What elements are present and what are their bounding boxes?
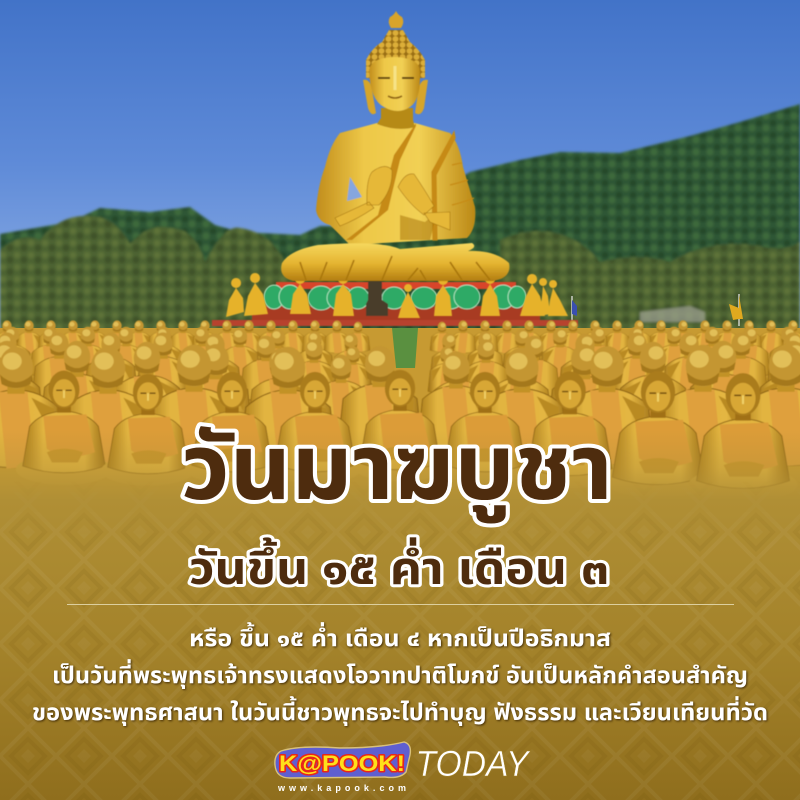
Buddha face [369, 57, 420, 111]
ground behind monks [0, 328, 800, 514]
gap between arm and torso [347, 177, 362, 201]
subtitle: date: วันขึ้น ๑๕ ค่ำ เดือน ๓ [189, 537, 609, 594]
Buddha robe sash [346, 123, 416, 240]
rows of golden monk statues [0, 320, 800, 502]
Buddha ears [363, 80, 428, 114]
sky background [0, 0, 800, 330]
small golden disciples around base [226, 273, 568, 318]
panel: gold patterned text background [0, 430, 800, 800]
divider [67, 604, 734, 605]
body text: หรือ ขึ้น ๑๕ ค่ำ เดือน ๔ หากเป็นปีอธิกมาส [189, 622, 611, 651]
Buddha shaded lap [400, 212, 437, 240]
giant golden Buddha statue [281, 11, 509, 281]
logo wordmark: K@POOK! [279, 751, 405, 776]
Buddha torso and arms [316, 123, 475, 245]
body text: ของพระพุทธศาสนา ในวันนี้ชาวพุทธจะไปทำบุญ ฟังธรรม และเวียนเทียนที่วัด [32, 696, 768, 726]
landscape: hills and trees [0, 104, 800, 330]
lotus base of statue [212, 276, 578, 326]
body text [32, 622, 768, 726]
Buddha hands [335, 166, 450, 230]
logo url: www.kapook.com [277, 783, 406, 793]
Buddha crossed legs [281, 243, 509, 281]
body text: เป็นวันที่พระพุทธเจ้าทรงแสดงโอวาทปาติโมกข์ อันเป็นหลักคำสอนสำคัญ [52, 659, 748, 689]
title: วันมาฆบูชา [181, 417, 613, 524]
logo: Kapook Today [275, 742, 531, 793]
Buddha finial [389, 11, 403, 28]
logo today text: TODAY [416, 743, 531, 784]
Buddha ushnisha curls [366, 30, 425, 78]
Buddha neck [377, 108, 415, 129]
logo badge [275, 742, 410, 778]
aisle [392, 328, 418, 368]
icon: flags [572, 294, 743, 326]
